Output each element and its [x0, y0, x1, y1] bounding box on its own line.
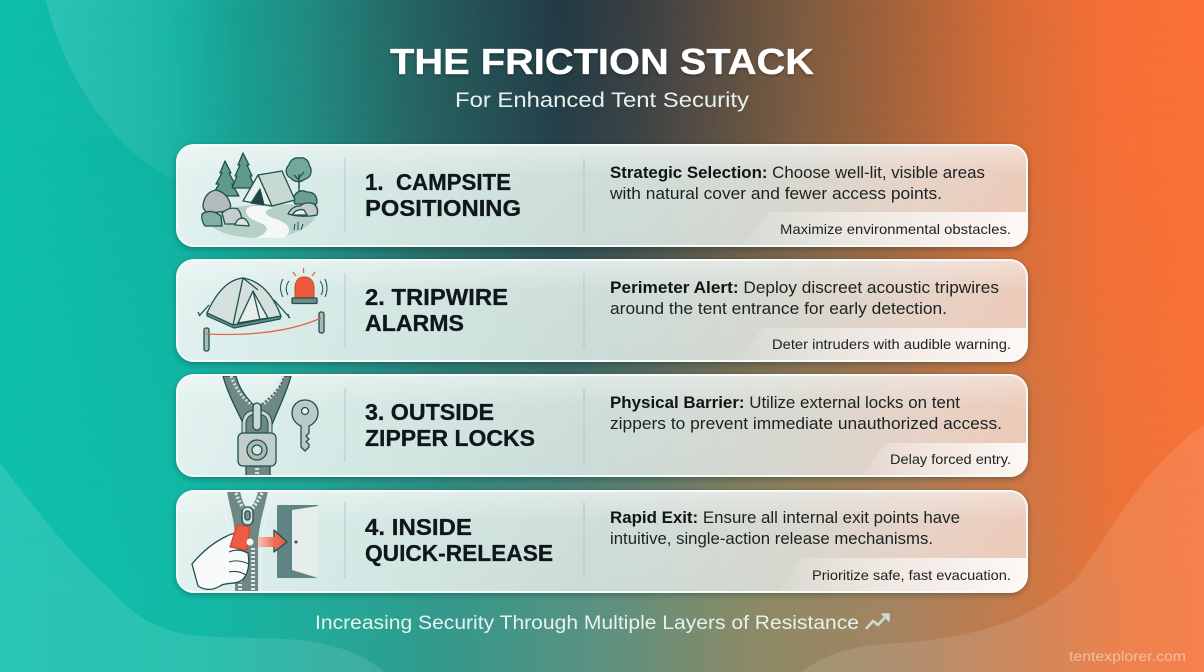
panel: outside zipper locks — [177, 375, 1027, 476]
heading — [365, 514, 553, 566]
title: THE FRICTION STACK — [390, 41, 815, 82]
panel: tripwire alarms — [177, 260, 1027, 361]
heading: 2. TRIPWIRE — [365, 284, 508, 310]
icon: upward trend arrow — [866, 614, 889, 629]
watermark: tentexplorer.com — [1069, 649, 1186, 664]
description — [609, 163, 985, 203]
heading: ALARMS — [365, 310, 464, 336]
subtitle: For Enhanced Tent Security — [455, 89, 750, 112]
description: Perimeter Alert: Deploy discreet acoustic tripwires — [610, 278, 999, 297]
callout: Deter intruders with audible warning. — [772, 336, 1011, 352]
footer tagline: Increasing Security Through Multiple Layers of Resistance — [315, 613, 859, 634]
description: zippers to prevent immediate unauthorized access. — [610, 414, 1002, 433]
description: Rapid Exit: Ensure all internal exit points have — [610, 508, 960, 527]
icon: tent with tripwire and alarm — [198, 268, 327, 351]
description: with natural cover and fewer access points. — [609, 184, 942, 203]
heading: 4. INSIDE — [365, 514, 472, 540]
callout: Maximize environmental obstacles. — [780, 221, 1011, 237]
heading: ZIPPER LOCKS — [365, 425, 535, 451]
heading: 1. CAMPSITE — [365, 169, 511, 195]
heading — [365, 284, 508, 336]
heading — [365, 399, 535, 451]
icon: campsite — [202, 153, 318, 238]
description: Physical Barrier: Utilize external locks on tent — [610, 393, 960, 412]
callout: Prioritize safe, fast evacuation. — [812, 567, 1011, 583]
icon: zipper padlock and key — [223, 376, 318, 476]
description — [610, 278, 999, 318]
description: Strategic Selection: Choose well-lit, visible areas — [610, 163, 985, 182]
description — [610, 508, 960, 548]
heading: QUICK-RELEASE — [365, 540, 553, 566]
description — [610, 393, 1002, 433]
heading: POSITIONING — [365, 195, 521, 221]
description: around the tent entrance for early detection. — [610, 299, 947, 318]
panel: inside quick-release — [177, 491, 1027, 592]
panel: campsite positioning — [177, 145, 1027, 246]
heading — [365, 169, 521, 221]
heading: 3. OUTSIDE — [365, 399, 494, 425]
description: intuitive, single-action release mechanisms. — [610, 529, 933, 548]
callout: Delay forced entry. — [890, 451, 1011, 467]
icon: zipper pull, arrow and door — [192, 491, 318, 592]
